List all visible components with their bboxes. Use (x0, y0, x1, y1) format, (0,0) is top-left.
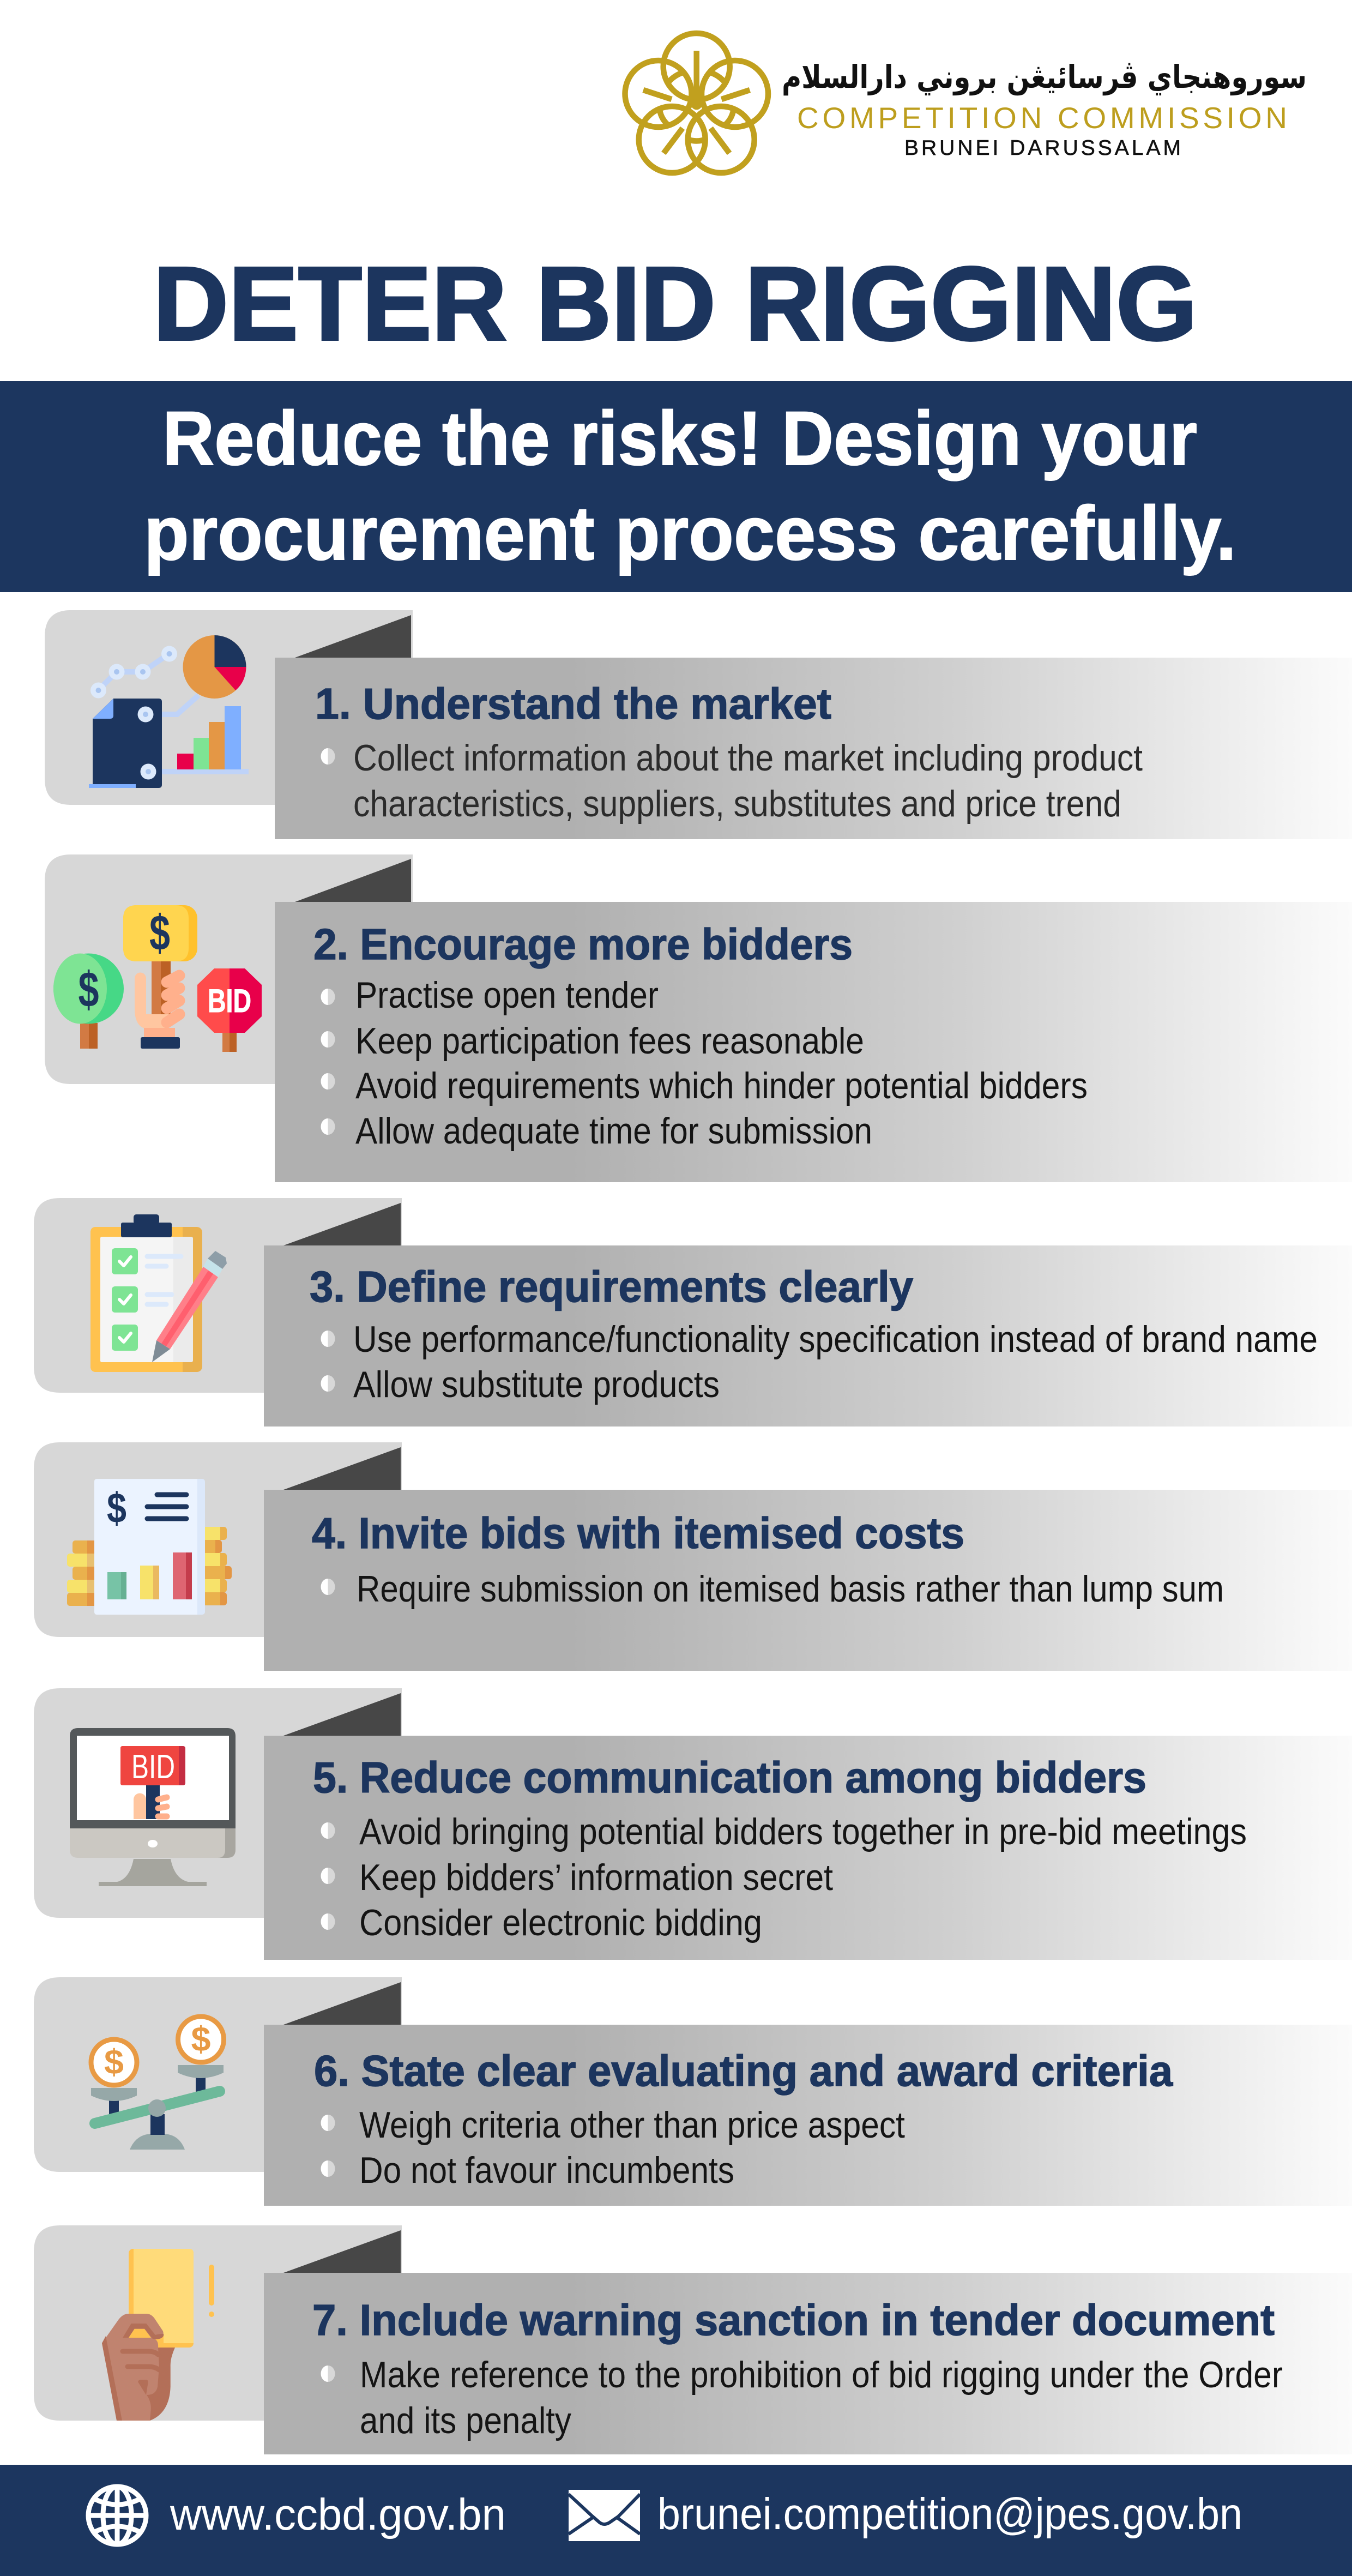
content bar (264, 1736, 1352, 1960)
icon: envelope (569, 2490, 640, 2541)
content bar (275, 658, 1352, 839)
panel 3: define requirements clearly (34, 1198, 1352, 1427)
bullet markers (321, 989, 335, 1135)
logo Brunei Darussalam: BRUNEI DARUSSALAM (904, 136, 1181, 160)
panel 7: include warning sanction (34, 2225, 1352, 2454)
title: DETER BID RIGGING (153, 245, 1197, 362)
bullet text: Do not favour incumbents (359, 2150, 734, 2191)
subtitle band (0, 381, 1352, 592)
logo emblem (625, 33, 768, 173)
heading: 3. Define requirements clearly (310, 1262, 913, 1311)
footer background (0, 2465, 1352, 2576)
fold triangle (283, 2230, 401, 2273)
fold triangle (283, 1447, 401, 1490)
heading: 4. Invite bids with itemised costs (312, 1509, 964, 1557)
logo Competition Commission: COMPETITION COMMISSION (797, 101, 1287, 135)
icon: monitor with bid sign (70, 1728, 236, 1886)
bullet text: Consider electronic bidding (359, 1902, 762, 1943)
bullet text: Allow adequate time for submission (355, 1110, 872, 1152)
card background (34, 1198, 402, 1393)
panel 6: state clear evaluating and award criteria (34, 1977, 1352, 2206)
icon: bid signs and hand: BID (208, 983, 251, 1019)
bullet text: Require submission on itemised basis rather than lump sum (357, 1568, 1224, 1610)
icon: bid signs and hand: $ (149, 905, 170, 961)
heading: 2. Encourage more bidders (313, 920, 853, 968)
fold triangle (295, 615, 411, 658)
bullet text continued: characteristics, suppliers, substitutes and price trend (353, 783, 1121, 824)
icon: hand with yellow card (102, 2249, 214, 2421)
bullet text: Keep participation fees reasonable (355, 1020, 864, 1062)
card background (34, 1688, 402, 1918)
icon: market analytics (89, 635, 249, 788)
bullet text: Keep bidders’ information secret (359, 1857, 833, 1898)
card background (34, 1977, 402, 2172)
card background (34, 1442, 402, 1637)
icon: balance scale with coins: $ (104, 2042, 124, 2081)
bullet text continued: and its penalty (360, 2400, 571, 2441)
panel 4: invite bids with itemised costs (34, 1442, 1352, 1671)
heading: 7. Include warning sanction in tender document (312, 2296, 1275, 2344)
bullet text: Avoid requirements which hinder potential bidders (355, 1065, 1088, 1106)
bullet text: Allow substitute products (353, 1364, 720, 1405)
fold triangle (283, 1693, 401, 1736)
icon: monitor with bid sign: BID (131, 1748, 175, 1786)
subtitle line 2: procurement process carefully. (144, 490, 1236, 576)
icon: balance scale with coins (91, 2017, 224, 2150)
card background (45, 610, 413, 805)
fold triangle (295, 859, 411, 902)
bullet markers (321, 1822, 335, 1930)
card background (34, 2225, 402, 2421)
fold triangle (283, 1203, 401, 1245)
card background (45, 854, 413, 1084)
icon: itemised cost sheet and coins (67, 1479, 232, 1615)
icon: balance scale with coins: $ (191, 2019, 210, 2059)
bullet marker (321, 2366, 335, 2382)
icon: bid signs and hand (53, 905, 262, 1052)
subtitle line 1: Reduce the risks! Design your (162, 395, 1197, 481)
panel 1: understand the market (45, 610, 1352, 839)
bullet marker (321, 748, 335, 765)
bullet text: Avoid bringing potential bidders together in pre-bid meetings (359, 1811, 1247, 1852)
bullet marker (321, 1579, 335, 1595)
logo (625, 33, 1307, 173)
website: www.ccbd.gov.bn (170, 2490, 506, 2539)
content bar (275, 902, 1352, 1182)
bullet markers (321, 2115, 335, 2177)
content bar (264, 2025, 1352, 2206)
email: brunei.competition@jpes.gov.bn (657, 2489, 1242, 2539)
band background (0, 381, 1352, 592)
panel 2: encourage more bidders (45, 854, 1352, 1182)
heading: 1. Understand the market (315, 679, 831, 728)
panel 5: reduce communication among bidders (34, 1688, 1352, 1960)
bullet markers (321, 1331, 335, 1392)
heading: 5. Reduce communication among bidders (313, 1753, 1146, 1802)
icon: itemised cost sheet and coins: $ (107, 1484, 126, 1532)
icon: bid signs and hand: $ (79, 962, 99, 1018)
footer (0, 2465, 1352, 2576)
content bar (264, 2273, 1352, 2454)
bullet text: Weigh criteria other than price aspect (359, 2104, 905, 2146)
content bar (264, 1245, 1352, 1427)
heading: 6. State clear evaluating and award criteria (314, 2047, 1173, 2095)
content bar (264, 1490, 1352, 1671)
icon: checklist and pencil (90, 1214, 227, 1372)
bullet text: Collect information about the market including product (353, 737, 1143, 779)
bullet text: Practise open tender (355, 974, 659, 1016)
fold triangle (283, 1982, 401, 2025)
icon: globe (88, 2487, 146, 2544)
